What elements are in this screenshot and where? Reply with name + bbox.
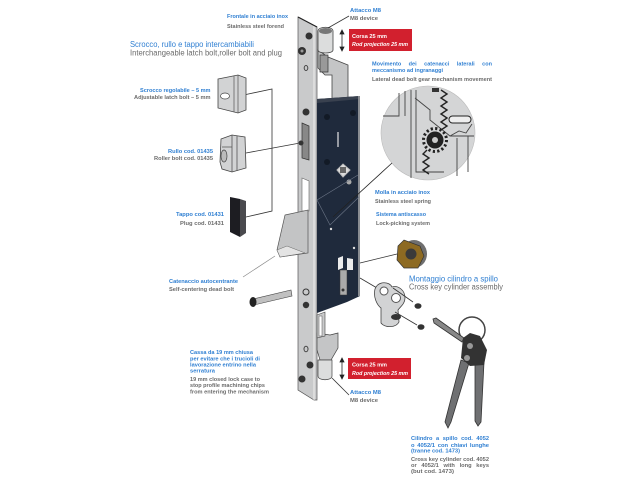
callout: rod projection top: Rod projection 25 mm <box>352 42 408 48</box>
screw <box>250 290 292 307</box>
label: adjustable latch bolt <box>134 88 211 101</box>
heading: cylinder assembly: Cross key cylinder assembly <box>409 282 503 292</box>
label: dead bolt <box>169 279 238 293</box>
callout: rod projection bottom: Corsa 25 mm <box>352 362 387 368</box>
label: forend: Frontale in acciaio inox <box>227 14 289 20</box>
label: spring <box>375 190 432 205</box>
icon: brass rosette <box>360 240 427 288</box>
text: closed lock case: from entering the mechanism <box>190 390 269 396</box>
label: adjustable latch bolt: Scrocco regolabile – 5 mm <box>140 88 211 94</box>
text: closed lock case: stop profile machining chips <box>190 383 265 389</box>
label: adjustable latch bolt: Adjustable latch bolt – 5 mm <box>134 95 211 101</box>
icon: adjustable latch bolt <box>218 75 246 113</box>
connector lines: bolts <box>246 89 300 217</box>
text: cross key cylinder: Cross key cylinder cod. 4052 <box>411 457 489 463</box>
label: M8 top <box>350 8 381 22</box>
label: spring: Stainless steel spring <box>375 199 432 205</box>
label: dead bolt: Self-centering dead bolt <box>169 287 234 293</box>
dead bolt <box>277 210 308 257</box>
callout: rod projection top <box>349 29 412 51</box>
label: M8 bottom: Attacco M8 <box>350 390 381 396</box>
label: gear mechanism <box>372 62 493 83</box>
label: lock-picking: Sistema antiscasso <box>376 212 427 218</box>
text: cross key cylinder: o 4052/1 con chiavi lunghe <box>411 443 489 449</box>
text: cross key cylinder: or 4052/1 with long keys <box>411 463 489 469</box>
label: plug <box>176 212 224 227</box>
text: closed lock case: serratura <box>190 368 216 374</box>
heading: interchangeable bolts: Scrocco, rullo e tappo intercambiabili <box>130 40 254 49</box>
heading: interchangeable bolts <box>130 40 282 58</box>
heading: interchangeable bolts: Interchangeable latch bolt,roller bolt and plug <box>130 48 282 58</box>
label: lock-picking: Lock-picking system <box>376 221 430 227</box>
callout: rod projection bottom: Rod projection 25 mm <box>352 371 408 377</box>
label: M8 bottom <box>350 390 381 404</box>
leaders: M8 <box>328 16 349 395</box>
label: roller bolt <box>154 149 213 162</box>
text: closed lock case: lavorazione entrino nella <box>190 362 257 368</box>
icon: plug <box>230 197 246 237</box>
label: roller bolt: Roller bolt cod. 01435 <box>154 156 213 162</box>
label: gear mechanism: meccanismo ad ingranaggi <box>372 68 443 74</box>
label: plug: Plug cod. 01431 <box>180 221 224 227</box>
leader: detail circle <box>333 163 392 217</box>
label: spring: Molla in acciaio inox <box>375 190 431 196</box>
label: plug: Tappo cod. 01431 <box>176 212 224 218</box>
icon: keys <box>433 317 487 428</box>
label: dead bolt: Catenaccio autocentrante <box>169 279 238 285</box>
label: M8 top: M8 device <box>350 16 378 22</box>
text: closed lock case <box>190 350 269 396</box>
travel arrows <box>340 30 344 379</box>
label: roller bolt: Rullo cod. 01435 <box>168 149 213 155</box>
label: gear mechanism: Movimento dei catenacci laterali con <box>372 62 493 68</box>
icon: cylinder <box>374 283 405 327</box>
lock case <box>317 96 360 313</box>
text: cross key cylinder <box>411 436 489 475</box>
text: cross key cylinder: (but cod. 1473) <box>411 469 454 475</box>
heading: cylinder assembly: Montaggio cilindro a spillo <box>409 274 499 284</box>
label: gear mechanism: Lateral dead bolt gear mechanism movement <box>372 77 492 83</box>
cylinder screws <box>393 288 424 330</box>
heading: cylinder assembly <box>409 274 503 292</box>
text: cross key cylinder: Cilindro a spillo cod. 4052 <box>411 436 489 442</box>
label: M8 top: Attacco M8 <box>350 8 381 14</box>
label: lock-picking <box>376 212 430 227</box>
label: forend <box>227 14 289 30</box>
callout: rod projection bottom <box>348 358 411 379</box>
top rod <box>318 27 348 100</box>
detail circle: gear <box>381 86 475 180</box>
label: M8 bottom: M8 device <box>350 398 378 404</box>
callout: rod projection top: Corsa 25 mm <box>352 34 387 40</box>
icon: roller bolt <box>220 135 246 172</box>
label: forend: Stainless steel forend <box>227 24 285 30</box>
text: closed lock case: Cassa da 19 mm chiusa <box>190 350 254 356</box>
text: cross key cylinder: (tranne cod. 1473) <box>411 448 460 454</box>
bottom rod <box>317 312 338 380</box>
forend plate <box>298 17 317 400</box>
text: closed lock case: per evitare che i trucioli di <box>190 356 260 362</box>
text: closed lock case: 19 mm closed lock case to <box>190 377 261 383</box>
leader: dead bolt <box>243 256 275 277</box>
